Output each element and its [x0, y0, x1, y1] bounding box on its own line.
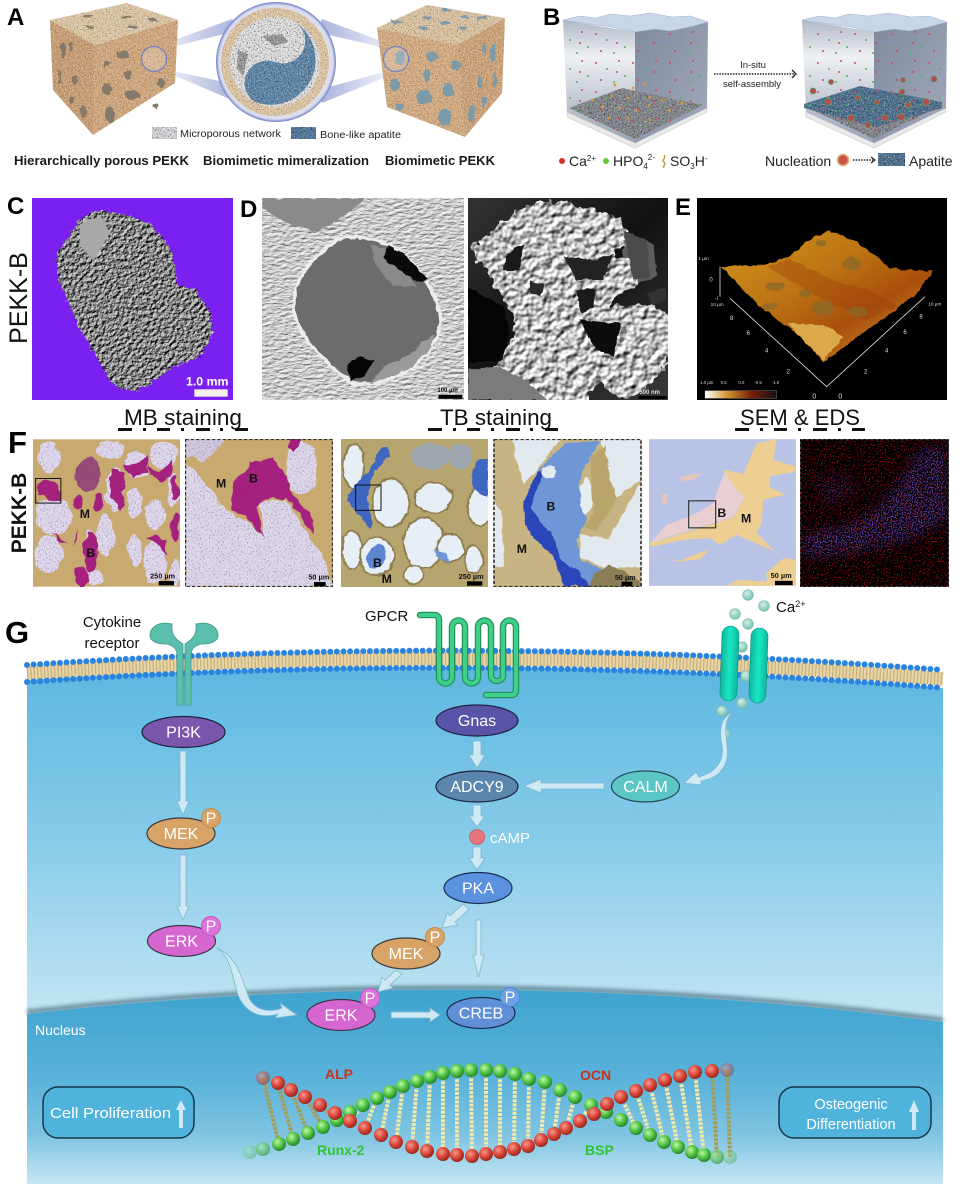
node: PKA	[444, 872, 512, 904]
MB staining overview: B	[86, 546, 95, 560]
callout: cell proliferation	[43, 1087, 194, 1138]
node: Gnas: Gnas	[458, 713, 496, 730]
label D: D	[240, 196, 257, 223]
label F: F	[8, 425, 27, 460]
AFM 3D surface plot: 0	[709, 278, 713, 284]
icon: GPCR serpentine	[420, 615, 516, 695]
panel G: signalling pathway	[5, 590, 943, 1184]
PEKK-B rotated label: PEKK-B	[5, 252, 33, 344]
MB staining magnified: 50 µm	[308, 573, 330, 582]
legend: Ca, HPO4, SO3H: HPO	[613, 153, 643, 169]
AFM 3D surface plot: 0	[838, 393, 842, 400]
legend: Ca, HPO4, SO3H: SO	[670, 153, 690, 169]
TB staining overview: B	[373, 556, 382, 570]
AFM 3D surface plot: 0.5	[721, 380, 727, 385]
legend: Ca, HPO4, SO3H: -	[705, 154, 708, 163]
node: MEK left	[147, 808, 220, 849]
legend: Ca, HPO4, SO3H: 2-	[648, 153, 655, 162]
right solution box with apatite	[802, 13, 947, 148]
panel C: micro-CT of PEKK-B	[5, 193, 233, 400]
SEM apatite cluster image	[468, 198, 668, 400]
node: Gnas	[436, 705, 518, 736]
node: ERK nucleus	[307, 988, 380, 1030]
MB staining magnified: B	[249, 471, 258, 485]
AFM 3D surface plot	[697, 198, 947, 400]
caption: mineralization: Biomimetic mimeralization	[203, 154, 369, 168]
MB staining magnified	[185, 439, 333, 587]
legend: bone-like apatite: Bone-like apatite	[320, 130, 401, 141]
heading: SEM and EDS: SEM & EDS	[740, 405, 860, 430]
label C: C	[7, 193, 24, 220]
node: ERK left: ERK	[165, 934, 198, 950]
callout: osteogenic differentiation: Osteogenic	[814, 1097, 888, 1113]
text: cytokine receptor: receptor	[84, 635, 140, 652]
panel B: in-situ self-assembly	[543, 4, 953, 171]
TB staining magnified: 50 µm	[615, 573, 636, 582]
gene labels: OCN	[580, 1067, 611, 1083]
EDS elemental map	[800, 439, 949, 587]
nucleus	[27, 988, 943, 1184]
heading: MB staining: MB staining	[124, 405, 242, 430]
label G: G	[5, 615, 29, 650]
caption: biomimetic PEKK: Biomimetic PEKK	[385, 154, 495, 168]
AFM 3D surface plot: 1 µm	[698, 256, 709, 261]
biomimetic PEKK cube	[377, 5, 505, 137]
legend: Ca, HPO4, SO3H	[559, 153, 708, 171]
dotted arrow with In-situ self-assembly: self-assembly	[723, 79, 781, 90]
text: Ca2+: Ca	[776, 599, 795, 616]
node: ERK left	[148, 916, 220, 956]
magnification cones	[158, 19, 392, 103]
node: CALM	[612, 771, 680, 802]
node: PI3K	[142, 716, 225, 748]
SEM pore image	[262, 198, 464, 400]
legend: nucleation to apatite	[765, 153, 953, 169]
node: ADCY9: ADCY9	[450, 779, 504, 796]
panel E: AFM topography	[675, 194, 947, 400]
micro-CT render	[32, 198, 233, 400]
DNA double helix	[243, 1063, 737, 1164]
MB staining overview	[33, 439, 180, 587]
porous PEKK cube	[50, 3, 178, 135]
icon: cytokine receptor	[150, 623, 218, 705]
dotted arrow with In-situ self-assembly: In-situ	[740, 60, 766, 71]
legend: Ca, HPO4, SO3H: 4	[643, 162, 648, 171]
label E: E	[675, 194, 691, 221]
micro-CT render: 1.0 mm	[186, 375, 229, 389]
legend: nucleation to apatite: Nucleation	[765, 153, 831, 169]
gene labels	[317, 1066, 614, 1158]
node: cAMP: cAMP	[490, 830, 530, 847]
red strand beads	[256, 1063, 734, 1163]
gene labels: Runx-2	[317, 1142, 365, 1158]
cell membrane bilayer	[27, 651, 943, 688]
AFM 3D surface plot: 6	[747, 331, 751, 337]
gene labels: ALP	[325, 1066, 353, 1082]
MB staining magnified: M	[216, 477, 226, 491]
node: PKA: PKA	[462, 880, 494, 898]
dotted arrow with In-situ self-assembly	[714, 60, 796, 90]
legend: Ca, HPO4, SO3H: H	[695, 153, 705, 169]
DNA front rungs	[350, 1070, 704, 1156]
SEM pseudo-colour image: M	[741, 512, 751, 526]
TB staining magnified: B	[547, 500, 556, 514]
left solution box	[563, 13, 708, 148]
pathway arrows	[177, 711, 735, 1022]
TB staining overview: M	[382, 572, 392, 586]
legend: Ca, HPO4, SO3H: 2+	[587, 154, 596, 163]
node: MEK centre: MEK	[389, 946, 424, 963]
AFM 3D surface plot: 2	[864, 369, 868, 375]
text: cytokine receptor: Cytokine	[83, 614, 141, 631]
node: CREB: CREB	[459, 1006, 503, 1022]
node: cAMP	[470, 830, 530, 847]
TB staining overview	[341, 439, 488, 587]
text: Ca2+: 2+	[795, 599, 805, 609]
SEM pseudo-colour image	[649, 439, 796, 586]
AFM 3D surface plot: 4	[885, 348, 889, 354]
AFM 3D surface plot: -1.0	[772, 380, 780, 385]
node: CALM: CALM	[623, 779, 668, 796]
SEM pore image: 100 µm	[437, 388, 458, 394]
node: CREB: P	[505, 990, 515, 1006]
AFM 3D surface plot: 10 µm	[711, 302, 724, 307]
caption: porous PEKK: Hierarchically porous PEKK	[14, 154, 189, 168]
yin-yang magnified sphere	[216, 2, 336, 122]
AFM 3D surface plot: 10 µm	[928, 301, 941, 306]
magnifying lens markers	[142, 46, 408, 72]
panel D: SEM images	[240, 196, 675, 411]
AFM 3D surface plot: 1.0 µm	[700, 380, 714, 385]
TB staining magnified	[493, 439, 642, 587]
label B: B	[543, 4, 560, 31]
SEM apatite cluster image: 500 nm	[639, 390, 660, 396]
MB staining overview: 250 µm	[150, 571, 176, 580]
AFM 3D surface plot: 6	[903, 330, 907, 336]
green strand beads	[243, 1063, 737, 1164]
text: GPCR: GPCR	[365, 608, 409, 625]
legend: microporous network	[152, 127, 282, 140]
text: cytokine receptor	[83, 614, 141, 652]
callout: cell proliferation: Cell Proliferation	[50, 1106, 171, 1122]
callout: osteogenic differentiation: Differentiation	[806, 1117, 896, 1133]
legend: microporous network: Microporous network	[180, 129, 282, 140]
node: CREB	[447, 988, 520, 1028]
AFM 3D surface plot: -0.5	[754, 380, 762, 385]
icon: calcium channel	[720, 626, 768, 703]
calcium ions	[717, 590, 769, 739]
AFM 3D surface plot: 2	[787, 369, 791, 375]
legend: Ca, HPO4, SO3H: Ca	[569, 153, 587, 169]
node: MEK left: MEK	[164, 826, 199, 843]
legend: nucleation to apatite: Apatite	[909, 153, 953, 169]
node: MEK centre	[372, 928, 444, 969]
node: ADCY9	[436, 771, 518, 802]
TB staining overview: 250 µm	[459, 572, 484, 581]
SEM pseudo-colour image: B	[717, 506, 726, 520]
panel F: histology and EDS	[8, 405, 949, 587]
AFM 3D surface plot: 8	[919, 314, 923, 320]
node: ERK nucleus: ERK	[325, 1008, 358, 1024]
legend: bone-like apatite	[291, 127, 401, 141]
SEM pseudo-colour image: 50 µm	[771, 571, 792, 580]
heading: TB staining: TB staining	[440, 405, 552, 430]
PEKK-B bold rotated label: PEKK-B	[8, 473, 31, 553]
node: ERK left: P	[206, 918, 216, 936]
panel A: biomimetic PEKK schematic	[7, 2, 505, 168]
DNA rear rungs	[263, 1070, 730, 1157]
text: nucleus: Nucleus	[35, 1022, 86, 1038]
AFM 3D surface plot: 0.0	[738, 380, 745, 385]
AFM 3D surface plot: 4	[765, 348, 769, 354]
gene labels: BSP	[585, 1142, 614, 1158]
MB staining overview: M	[80, 507, 90, 521]
legend: Ca, HPO4, SO3H: 3	[690, 162, 695, 171]
TB staining magnified: M	[517, 542, 527, 556]
AFM 3D surface plot: 8	[730, 316, 734, 322]
AFM 3D surface plot: 0	[812, 393, 816, 400]
node: MEK left: P	[206, 810, 216, 828]
node: MEK centre: P	[430, 930, 440, 946]
callout: osteogenic differentiation	[779, 1087, 931, 1138]
label A: A	[7, 4, 24, 31]
AFM 3D surface plot: -1	[715, 295, 719, 300]
node: ERK nucleus: P	[365, 990, 375, 1008]
node: PI3K: PI3K	[166, 724, 201, 742]
cytoplasm	[27, 667, 943, 1040]
